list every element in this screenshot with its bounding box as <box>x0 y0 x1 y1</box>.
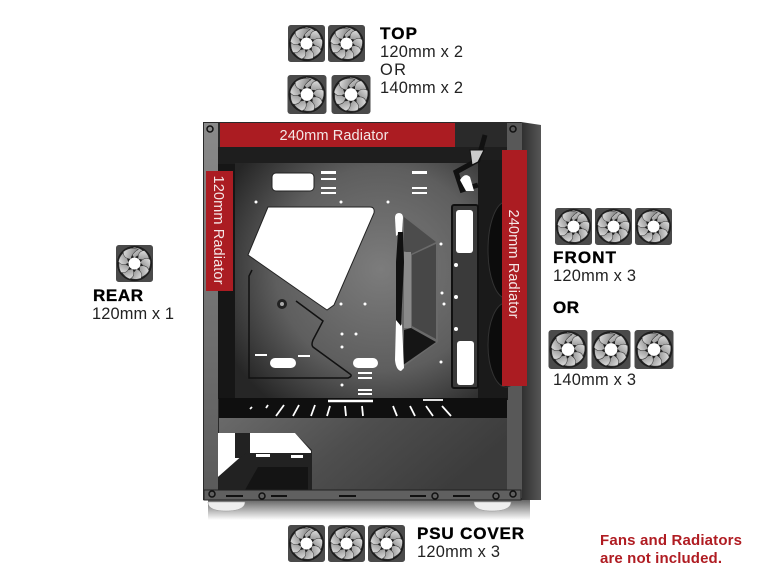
psu cover label: 120mm x 3 <box>417 543 500 561</box>
front label: 120mm x 3 <box>553 267 636 285</box>
mesh <box>245 467 308 490</box>
right cable channel <box>452 205 478 388</box>
front 140mm fan icons <box>547 328 675 370</box>
red bar: rear 120mm radiator <box>206 171 233 291</box>
top fan icons <box>286 23 372 115</box>
psu leg <box>235 433 250 458</box>
front 120mm fan icons <box>553 206 673 246</box>
disclaimer note: Fans and Radiators <box>600 532 742 549</box>
tray holes and slots <box>254 171 446 395</box>
case feet <box>208 502 511 511</box>
front label <box>553 248 636 317</box>
red bar: top 240mm radiator: 240mm Radiator <box>280 128 389 144</box>
top label: 120mm x 2 <box>380 43 463 61</box>
rear fan icon <box>114 243 154 283</box>
center cable opening <box>395 213 404 371</box>
cpu grommet <box>277 299 287 309</box>
red bar: front 240mm radiator <box>502 150 527 386</box>
rear label: REAR <box>93 286 143 305</box>
rear label: 120mm x 1 <box>92 305 174 323</box>
PC case illustration <box>203 122 541 520</box>
top label: TOP <box>380 24 417 43</box>
disclaimer note: are not included. <box>600 550 722 567</box>
motherboard tray <box>235 163 478 399</box>
psu cover label: PSU COVER <box>417 524 524 543</box>
red bar: rear 120mm radiator: 120mm Radiator <box>210 176 226 285</box>
top label: OR <box>380 61 406 79</box>
front label: FRONT <box>553 248 617 267</box>
red bar: front 240mm radiator: 240mm Radiator <box>505 210 521 319</box>
psu cover label <box>417 524 524 561</box>
front 140mm label: 140mm x 3 <box>553 371 636 389</box>
psu bay <box>218 453 312 490</box>
rear label <box>92 286 174 323</box>
motherboard outline <box>249 270 351 378</box>
case frame <box>203 122 521 500</box>
top label <box>380 24 463 97</box>
psu cutout <box>218 433 311 477</box>
front panel cables <box>456 135 485 190</box>
case bottom rail <box>204 490 521 500</box>
case side edge <box>521 122 541 500</box>
tray cutout <box>248 207 374 310</box>
front label: OR <box>553 298 579 317</box>
disclaimer note <box>600 532 742 567</box>
psu shroud top black floor <box>219 398 507 418</box>
floor slits <box>250 400 451 416</box>
top label: 140mm x 2 <box>380 79 463 97</box>
psu shroud <box>219 418 507 490</box>
case floor shadow <box>208 500 530 520</box>
red bar: top 240mm radiator <box>220 123 455 147</box>
center recess <box>402 214 438 368</box>
right fan shadows <box>478 160 524 400</box>
psu cover fan icons <box>286 523 406 563</box>
